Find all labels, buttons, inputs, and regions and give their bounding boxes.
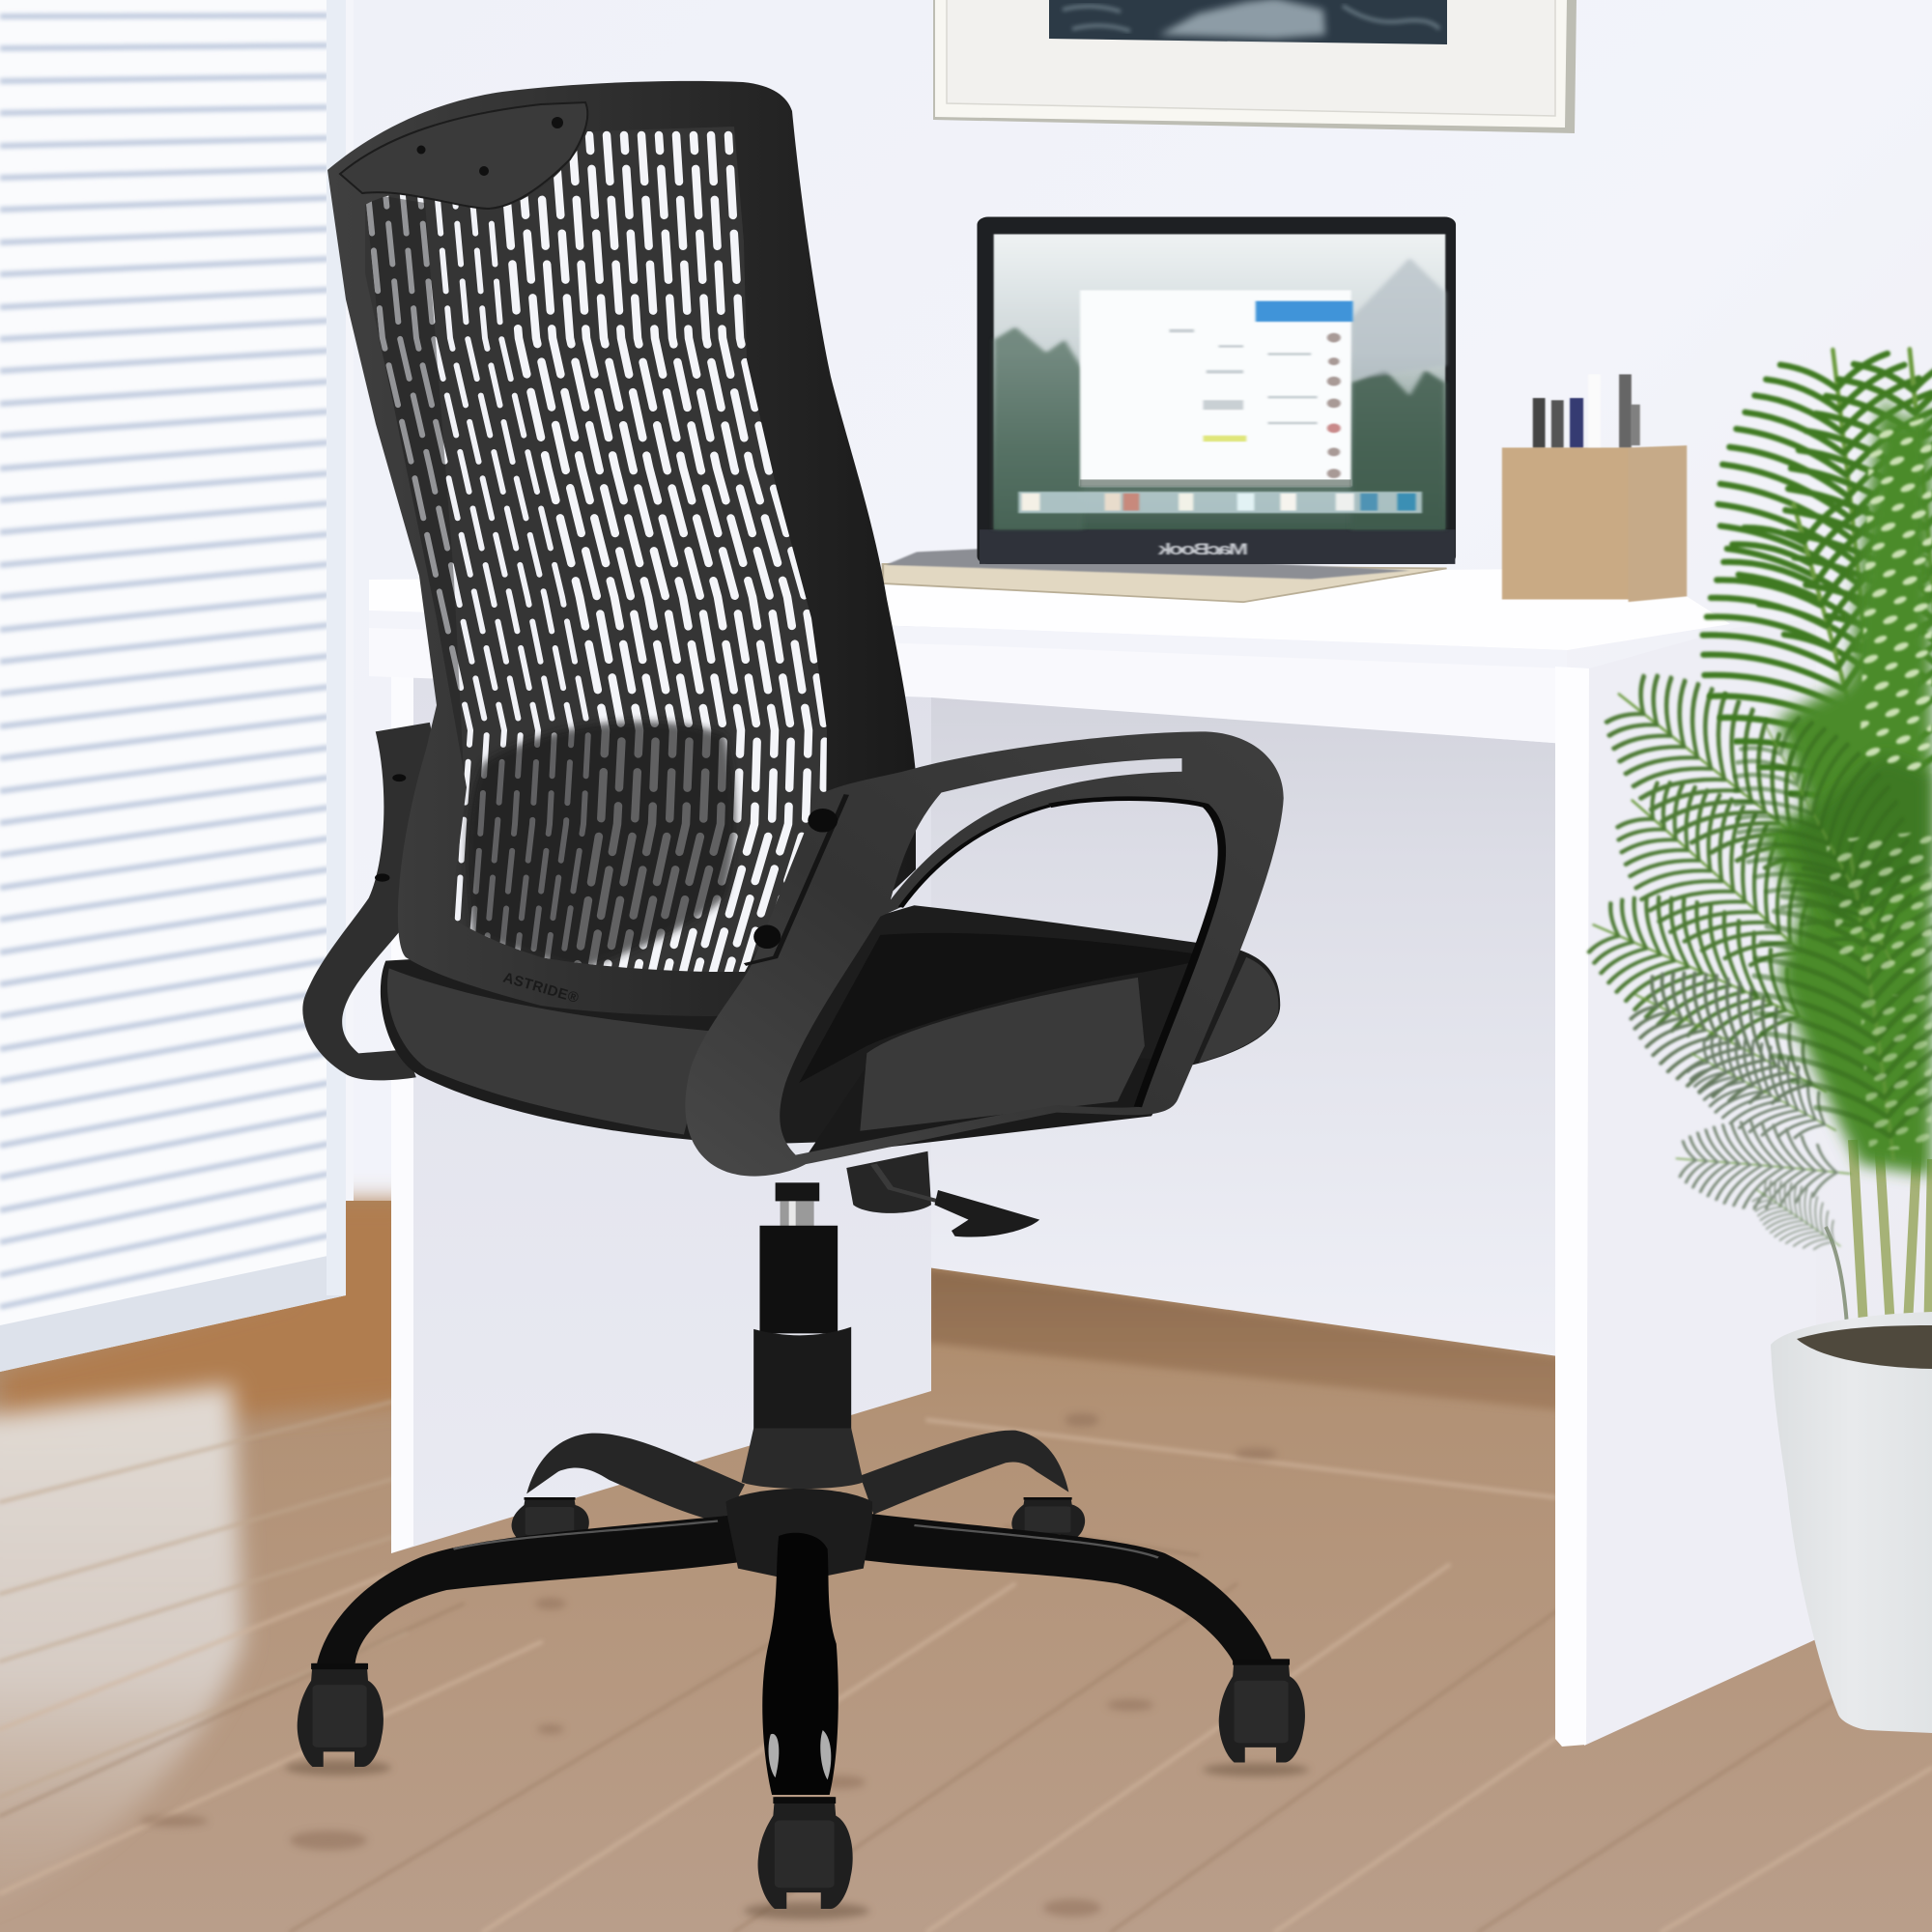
dock [1018,492,1422,513]
caster shadows [285,1760,1309,1919]
leaflet streaks over mass [1696,690,1932,1176]
front casters [298,1663,384,1767]
rear base legs [526,1431,1068,1523]
office chair [285,81,1309,1919]
upper fronds [1667,336,1932,874]
lid [977,217,1456,564]
pen holder [1502,374,1687,602]
plant [1567,336,1932,1733]
lumbar support shadow [467,722,735,971]
top cap [340,102,587,209]
pot [1771,1312,1932,1733]
laptop [883,217,1456,602]
back frame [327,81,916,1016]
left side arm [302,723,443,1080]
desk right side panel [1584,618,1816,1746]
desk [369,568,1816,1747]
brand mark: ASTRIDE® [501,970,581,1007]
foliage mass [1760,396,1932,1176]
gas lift column [742,1226,864,1489]
right arm rest [685,731,1284,1177]
pens [1533,374,1640,450]
wood mat [883,564,1446,602]
soil [1797,1325,1932,1369]
floor planks [0,1401,1932,1932]
front base legs [298,1489,1305,1909]
window blinds [0,0,354,1372]
ventilated mesh slots [365,127,827,972]
seat cushion [381,905,1280,1157]
rear casters [512,1497,1085,1544]
window reflection on floor [0,1385,243,1913]
under-desk back wall [927,696,1565,1357]
keyboard deck [886,549,1409,580]
box [1502,447,1634,600]
wispy lower fronds [1567,638,1881,1270]
plant stems [1853,1140,1932,1343]
leaflet highlights [1860,415,1932,773]
desk left panel [391,599,931,1553]
desk apron [369,609,1567,744]
floor [0,1201,1932,1932]
app window [1080,290,1351,487]
framed picture [933,0,1577,133]
screen wallpaper [994,234,1445,529]
mirrored brand label: MacBook [1158,540,1248,558]
seat mechanism and lever [776,1151,1039,1237]
base hub [725,1489,872,1581]
desk top [369,568,1730,650]
chair back [327,81,916,1016]
